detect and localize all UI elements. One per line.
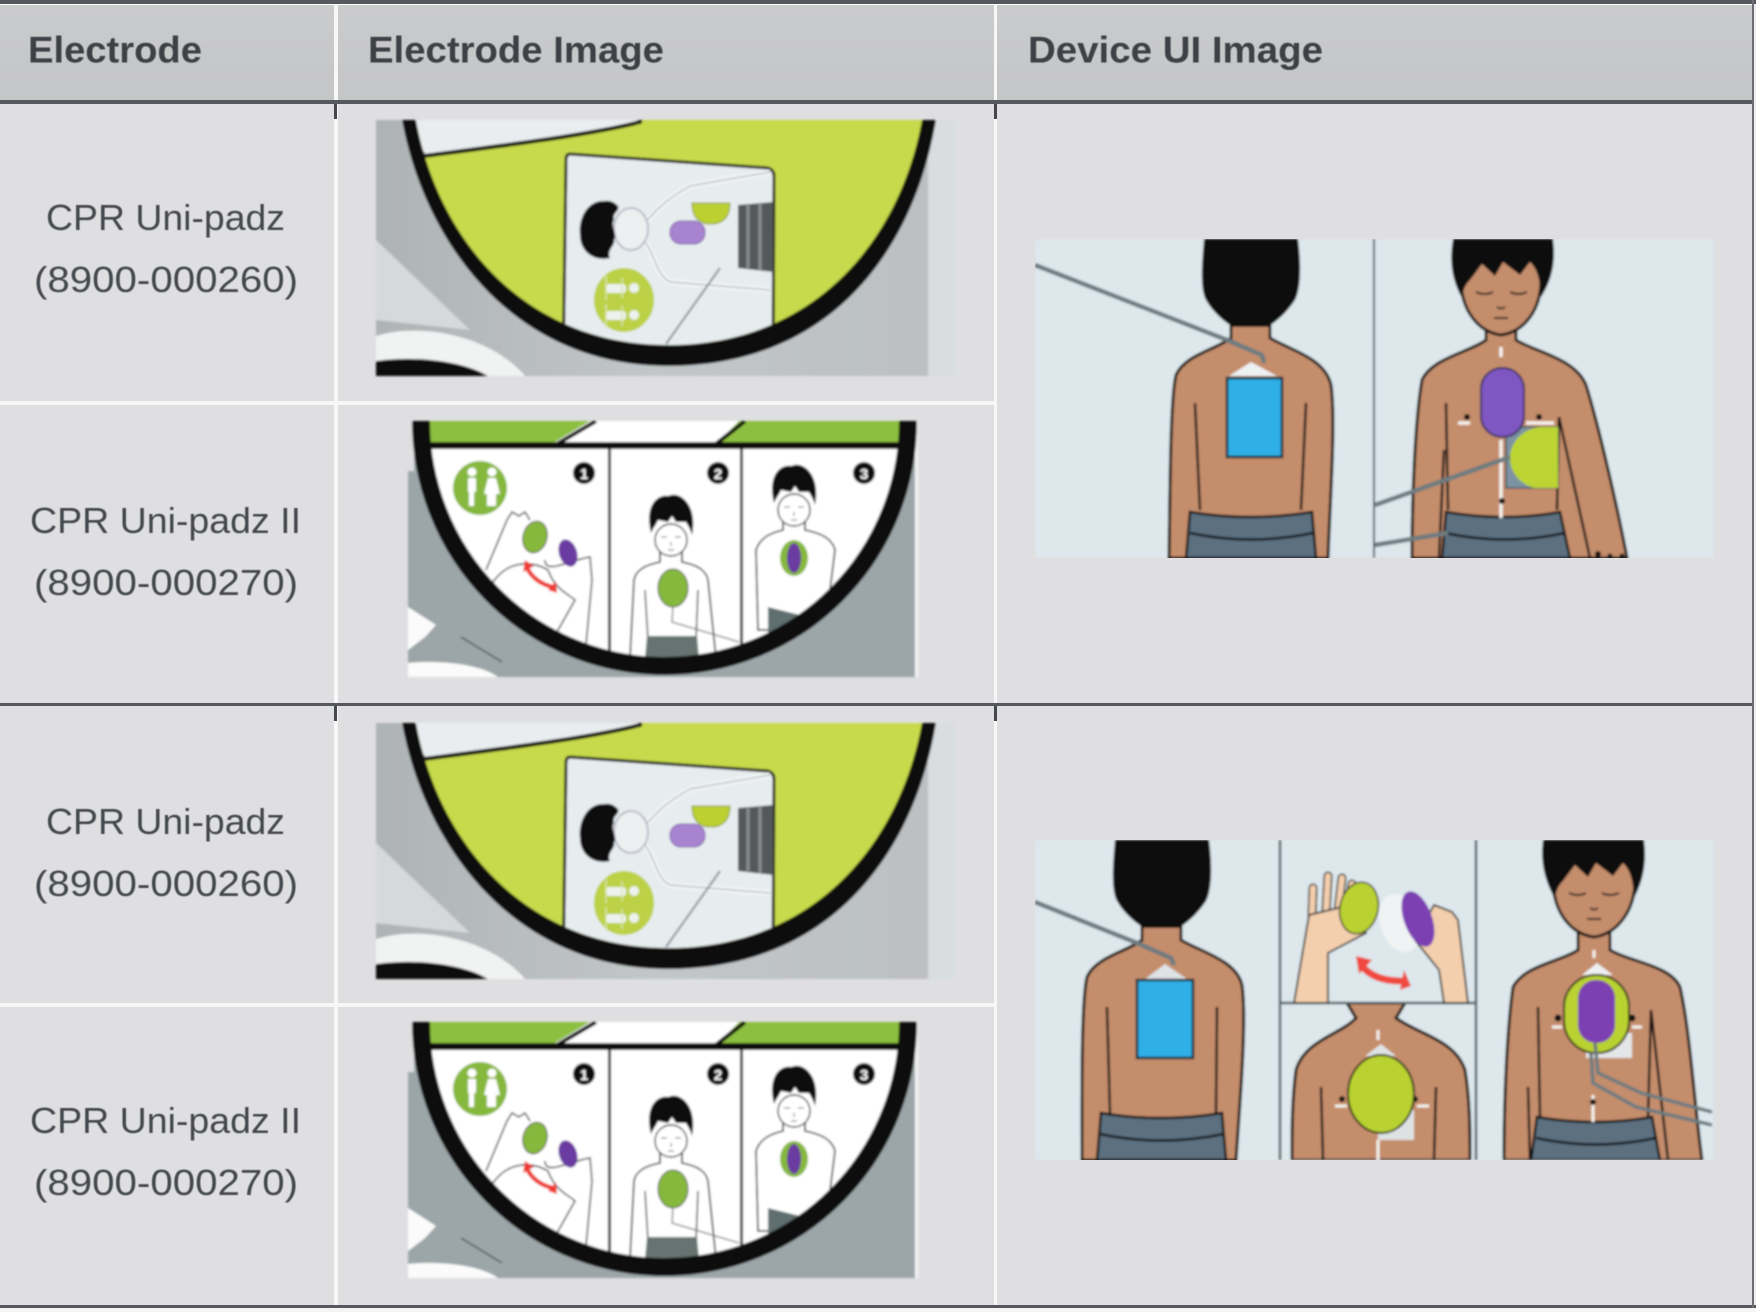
electrode image: CPR Uni-padz, row 3 bbox=[376, 719, 955, 983]
dish outline bbox=[421, 413, 908, 666]
row 3 electrode label: (8900-000260) bbox=[34, 863, 298, 904]
electrode image: CPR Uni-padz II, row 4 bbox=[408, 1014, 918, 1282]
row 2 electrode label bbox=[30, 500, 301, 603]
icon: boy front view with stacked pads bbox=[1504, 840, 1712, 1160]
header: Electrode Image: Electrode Image bbox=[368, 30, 664, 70]
row 4 electrode label: (8900-000270) bbox=[34, 1162, 298, 1203]
divider bbox=[1373, 239, 1375, 558]
row 4 electrode label: CPR Uni-padz II bbox=[30, 1100, 301, 1141]
step 2: boy with green pad bbox=[630, 462, 739, 659]
icon: boy front view with purple and green pads bbox=[1375, 239, 1627, 558]
icon: hands separating pads bbox=[1294, 876, 1468, 1003]
row 3 electrode label: CPR Uni-padz bbox=[46, 801, 285, 842]
icon: instruction card bbox=[563, 154, 774, 380]
row 1 electrode label: (8900-000260) bbox=[34, 259, 298, 300]
step 2: boy with green pad: 2 bbox=[714, 466, 722, 483]
row 1 electrode label: CPR Uni-padz bbox=[46, 197, 285, 238]
dividers bbox=[1280, 840, 1476, 1160]
row 4 electrode label bbox=[30, 1100, 301, 1203]
step 3: boy with both pads: 3 bbox=[860, 466, 868, 483]
icon: chest with green pad bbox=[1292, 1003, 1470, 1160]
electrode image: CPR Uni-padz II, row 2 bbox=[408, 413, 918, 681]
device UI panel: three-step pad placement bbox=[1035, 840, 1714, 1160]
icon: boy back view with blue pad bbox=[1035, 239, 1333, 558]
step 1: hands separating pads bbox=[453, 461, 595, 645]
step 3: boy with both pads bbox=[756, 462, 875, 640]
row 1 electrode label bbox=[34, 197, 298, 300]
header: Electrode: Electrode bbox=[28, 30, 202, 70]
icon: boy back view with blue pad bbox=[1035, 840, 1244, 1160]
row 3 electrode label bbox=[34, 801, 298, 904]
icon: green adult and child symbol bbox=[593, 267, 655, 333]
step 1: hands separating pads: 1 bbox=[580, 466, 588, 483]
dish outline bbox=[402, 120, 936, 366]
device UI panel: back and front pad placement bbox=[1035, 239, 1714, 558]
electrode image: CPR Uni-padz, row 1 bbox=[376, 116, 955, 380]
row 2 electrode label: (8900-000270) bbox=[34, 562, 298, 603]
row 2 electrode label: CPR Uni-padz II bbox=[30, 500, 301, 541]
header: Device UI Image: Device UI Image bbox=[1028, 30, 1323, 70]
green banner bbox=[421, 421, 908, 442]
